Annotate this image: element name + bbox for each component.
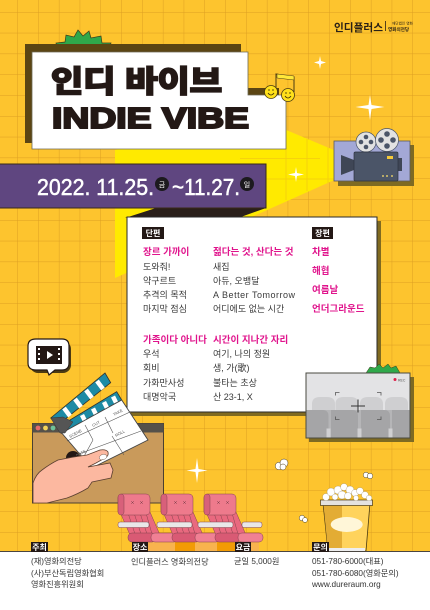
date banner: 금 (159, 181, 166, 189)
bottom orange band (148, 542, 259, 551)
tag: contact: 문의 (313, 542, 328, 552)
title text english: INDIE VIBE (52, 103, 249, 135)
short films tag (142, 227, 164, 239)
icon: green crown small (366, 364, 400, 373)
contact text: www.dureraum.org (311, 580, 381, 589)
title text korean: 인디 바이브 (51, 66, 222, 99)
list: young: 새집 (213, 261, 230, 272)
illustration: popcorn bucket (320, 484, 372, 551)
logo: Indieplus (334, 20, 414, 34)
projector light beam (115, 119, 341, 278)
title panel (25, 44, 286, 149)
clapper: TAKE (112, 408, 124, 417)
feature films tag: 장편 (315, 228, 330, 238)
logo: Indieplus: 영화의전당 (388, 26, 410, 33)
list: family: 회비 (143, 363, 160, 373)
panel: film list (127, 217, 381, 416)
contact text: 051-780-6000(대표) (312, 557, 384, 566)
contact text (311, 557, 399, 589)
logo: Indieplus: 인디플러스 (334, 21, 383, 34)
list: features: 언더그라운드 (312, 303, 365, 315)
organizers text (31, 556, 104, 589)
contact text: 051-780-6080(영화문의) (312, 568, 399, 578)
list: young: 어디에도 없는 시간 (213, 304, 284, 314)
list: genre (143, 246, 189, 314)
panel: viewfinder: REC (398, 378, 406, 382)
tag: organizer: 주최 (32, 542, 47, 552)
logo: Indieplus: 재단법인 영화 (392, 20, 414, 26)
list: genre: 도와줘! (143, 261, 170, 272)
list: time: 불타는 초상 (213, 378, 257, 388)
list: family: 우석 (143, 349, 160, 359)
hand (33, 450, 113, 503)
date banner: 일 (244, 180, 250, 189)
list: family: 가족이다 아니다 (143, 334, 207, 346)
list: young (213, 246, 296, 314)
list: genre: 마지막 점심 (143, 303, 187, 314)
sparkles (186, 56, 384, 483)
clapper (51, 373, 148, 468)
list: features: 해협 (312, 265, 329, 277)
list: family (143, 334, 207, 402)
date text: 2022. 11.25. (37, 174, 154, 200)
date banner (0, 164, 266, 218)
list: features: 차별 (312, 246, 329, 258)
feature films tag (312, 227, 333, 239)
organizers text: (사)부산독립영화협회 (31, 568, 104, 578)
icon: smiley music note (264, 74, 294, 102)
date banner: ~11.27. (172, 174, 240, 200)
tag: venue: 장소 (133, 542, 148, 552)
clapper: SCENE (68, 428, 83, 439)
seat 1 (118, 494, 178, 542)
list: young: A Better Tomorrow (213, 290, 296, 300)
list: time (213, 334, 288, 402)
panel: viewfinder (306, 373, 414, 442)
icon: video speech bubble (28, 339, 71, 375)
list: time: 생, 가(歌) (213, 363, 250, 373)
list: family: 대명악국 (143, 391, 176, 402)
list: features (312, 246, 365, 315)
list: time: 시간이 지나간 자리 (213, 334, 288, 346)
price text: 균일 5,000원 (234, 557, 279, 566)
seat 3 (198, 494, 263, 542)
list: time: 여기, 나의 정원 (213, 348, 270, 359)
organizers text: 영화진흥위원회 (31, 579, 84, 589)
organizers text: (재)영화의전당 (31, 556, 82, 566)
list: young: 젊다는 것, 산다는 것 (213, 246, 294, 258)
list: genre: 약구르트 (143, 275, 176, 286)
list: young: 아듀, 오뱅달 (213, 275, 259, 286)
illustration: cinema seats (118, 494, 263, 542)
popcorn pieces (275, 459, 373, 522)
list: time: 산 23-1, X (213, 392, 253, 402)
footer (0, 542, 430, 610)
seat 2 (157, 494, 220, 542)
venue text: 인디플러스 영화의전당 (131, 556, 209, 566)
icon: film projector (334, 128, 414, 186)
list: genre: 추격의 목적 (143, 289, 187, 300)
tag: price: 요금 (236, 543, 251, 552)
list: features: 여름날 (312, 284, 338, 296)
list: genre: 장르 가까이 (143, 246, 189, 258)
list: family: 가화만사성 (143, 378, 184, 388)
icon: green crown (56, 30, 111, 52)
short films tag: 단편 (146, 228, 160, 238)
clapper: DATE (75, 448, 87, 458)
clapper: CUT (91, 419, 101, 428)
illustration: browser window with clapperboard (32, 373, 164, 503)
clapper: ROLL (114, 428, 126, 438)
